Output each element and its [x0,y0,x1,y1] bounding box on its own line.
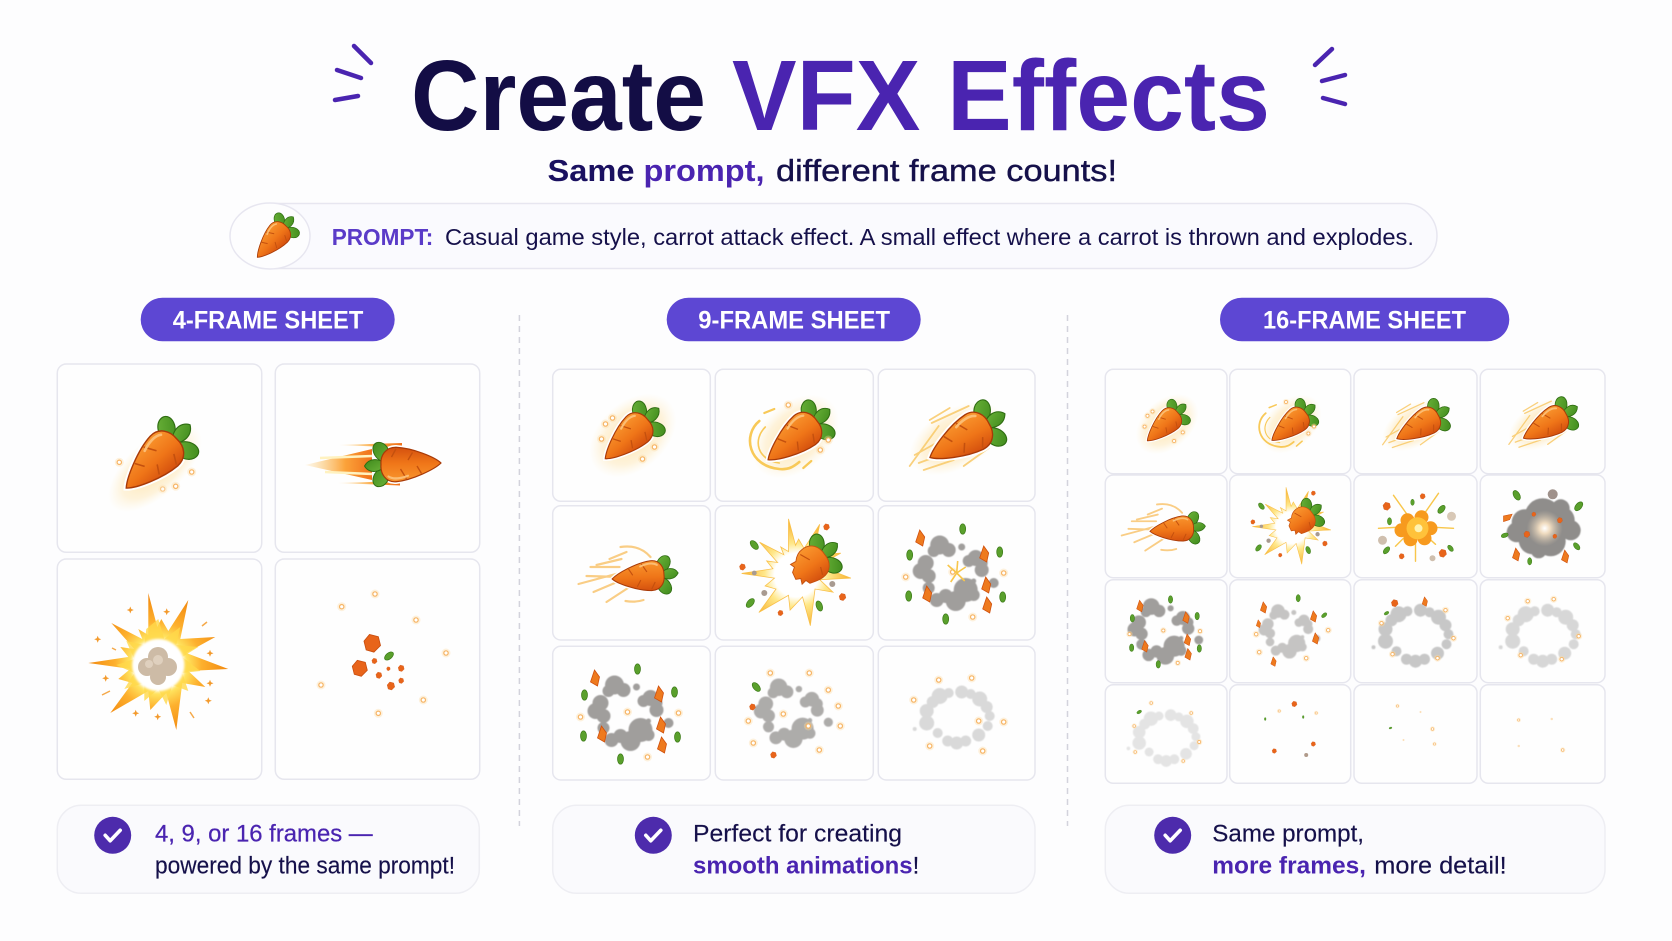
subtitle [548,153,1117,188]
frame 9 of 16 [1105,580,1227,683]
heading: 4-frame pill: 4-FRAME SHEET [173,306,363,334]
callout: 9-frame note: ! [913,852,919,879]
frame 1: carrot [57,364,262,552]
callout: 9-frame note: Perfect for creating [693,821,902,848]
frame 4 of 16 [1480,369,1605,474]
icon: check [635,817,672,854]
heading: 16-frame pill [1220,298,1509,341]
heading: 9-frame pill: 9-FRAME SHEET [698,306,890,334]
frame 7 of 9 [553,646,710,780]
callout: 9-frame note: smooth animations [693,852,913,879]
frame 2 of 16 [1230,369,1351,474]
icon: check [94,817,131,854]
callout: 4-frame note: powered by the same prompt! [155,852,455,879]
frame 9 of 9 [878,646,1035,780]
frame 1 of 16 [1105,369,1227,474]
panel: 16-frame sheet [1105,298,1605,893]
panel: 4-frame sheet [57,298,480,893]
icon: right title sparks [1315,49,1345,104]
prompt bar [230,203,1437,269]
callout: 16-frame note: more detail! [1374,852,1507,879]
prompt text: Casual game style, carrot attack effect. A small effect where a carrot is thrown and explodes. [445,224,1414,250]
subtitle: different frame counts! [776,153,1117,188]
frame 11 of 16 [1354,580,1477,683]
title: Create [411,40,706,152]
frame 5 of 16 [1105,475,1227,578]
frame 12 of 16 [1480,580,1605,683]
divider [518,315,520,826]
frame 16 of 16 [1480,685,1605,783]
title: VFX Effects [732,40,1270,152]
prompt label: PROMPT: [332,224,433,250]
frame 14 of 16 [1230,685,1351,783]
heading: 4-frame pill [141,298,395,341]
icon: left title sparks [335,46,371,100]
subtitle: prompt, [644,153,764,188]
callout: 16-frame note: Same prompt, [1212,821,1364,848]
frame 4: debris and sparks [275,559,480,779]
frame 8 of 9 [715,646,873,780]
icon: carrot badge [230,203,310,269]
callout: 4-frame note [57,805,479,893]
frame 13 of 16 [1105,685,1227,783]
callout: 16-frame note [1105,805,1605,893]
frame 3: explosion burst [57,559,262,779]
heading: 16-frame pill: 16-FRAME SHEET [1263,306,1466,334]
frame 6 of 9 [878,506,1035,640]
frame 6 of 16 [1230,475,1351,578]
panel: 9-frame sheet [553,298,1035,893]
callout: 16-frame note: more frames, [1212,852,1366,879]
frame 3 of 16 [1354,369,1477,474]
frame 2: carrot thrown [275,364,480,552]
frame 8 of 16 [1480,475,1605,578]
frame 7 of 16 [1354,475,1477,578]
icon: check [1154,817,1191,854]
heading: 9-frame pill [667,298,921,341]
callout: 9-frame note [553,805,1035,893]
frame 5 of 9 [715,506,873,640]
frame 2 of 9 [715,369,873,501]
frame 1 of 9 [553,369,710,501]
title [411,40,1270,152]
frame 10 of 16 [1230,580,1351,683]
subtitle: Same [548,153,634,188]
frame 3 of 9 [878,369,1035,501]
frame 15 of 16 [1354,685,1477,783]
callout: 4-frame note: 4, 9, or 16 frames — [155,821,373,848]
frame 4 of 9 [553,506,710,640]
